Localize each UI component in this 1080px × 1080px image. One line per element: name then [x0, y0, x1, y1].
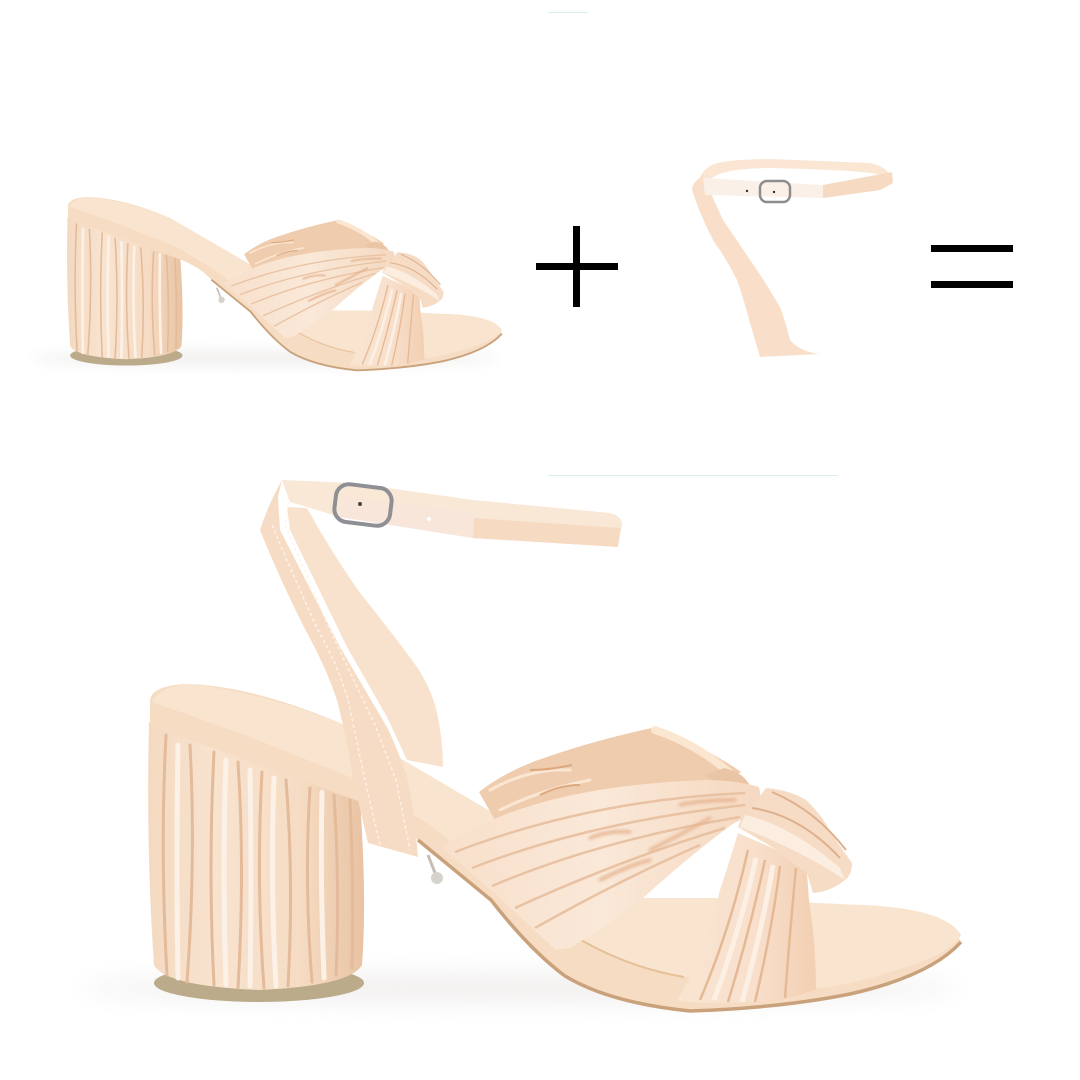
- inner ankle strap lining: [287, 507, 443, 767]
- faint top scan line: [548, 12, 588, 13]
- strap stitching: [272, 490, 410, 850]
- plus sign: [536, 226, 618, 307]
- small buckle: [746, 181, 790, 202]
- large sandal with strap: [80, 480, 961, 1011]
- strap loop lining: [698, 159, 893, 198]
- rear heel strap: [260, 480, 418, 857]
- strap suede end: [823, 172, 893, 198]
- strap front section: [703, 178, 823, 198]
- strap suede end: [473, 518, 620, 547]
- strap tail: [692, 176, 820, 357]
- small sandal without strap: [31, 197, 502, 370]
- detachable ankle strap: [692, 159, 893, 357]
- faint middle scan line: [548, 475, 838, 476]
- ankle strap band: [282, 480, 622, 547]
- large buckle: [333, 483, 431, 527]
- equals sign: [931, 245, 1013, 288]
- strap keeper: [340, 497, 474, 538]
